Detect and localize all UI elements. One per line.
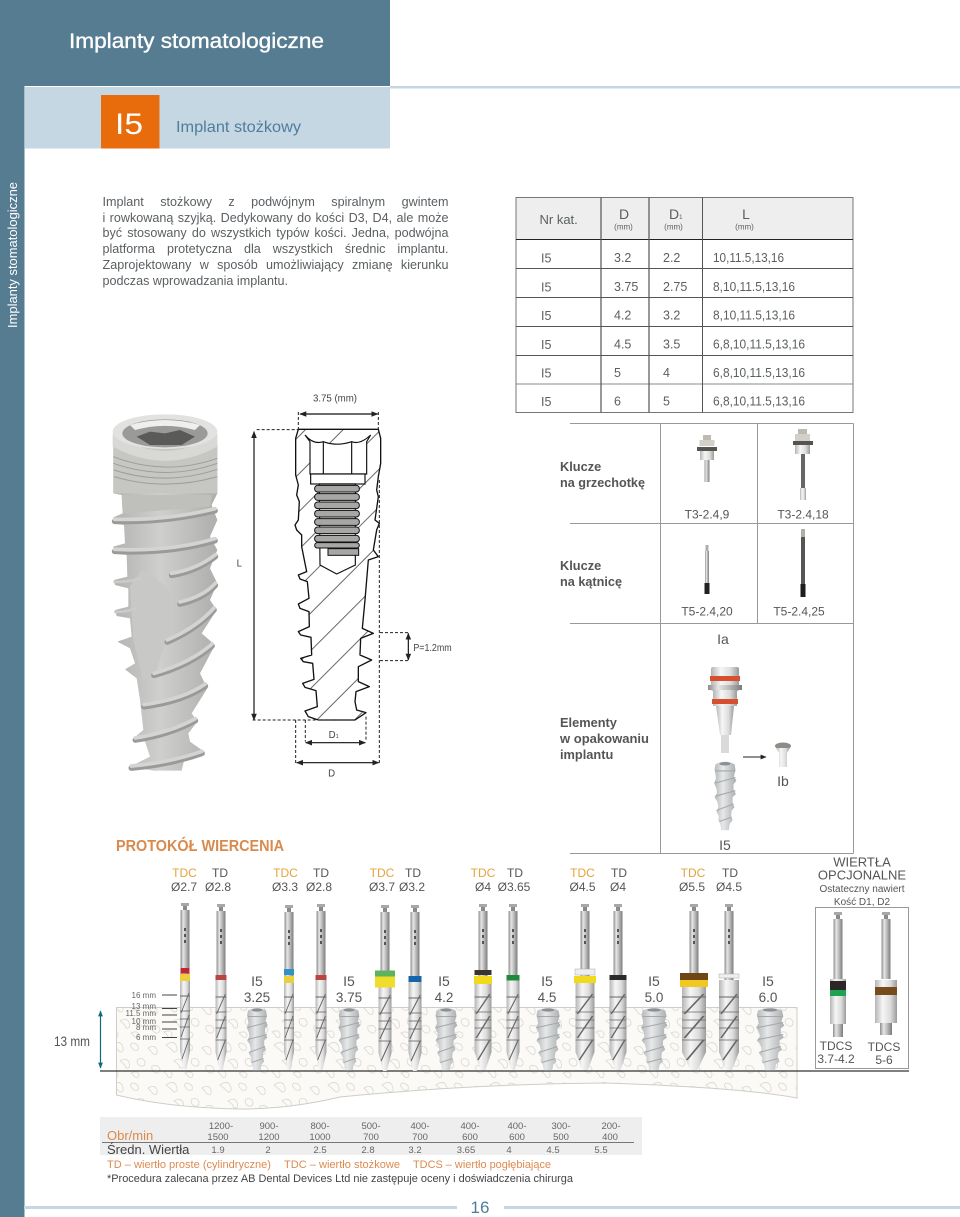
drill type labels: Ø4 <box>475 880 491 894</box>
implant 3.25: I5 <box>251 973 263 989</box>
product name: Implant stożkowy <box>176 119 301 136</box>
optional drills heading: Kość D1, D2 <box>834 897 891 908</box>
table rows <box>541 251 805 409</box>
section outline <box>295 429 381 720</box>
left sidebar band <box>0 0 24 1217</box>
drill TD 2.8 second <box>316 904 326 1070</box>
table rows: 10,11.5,13,16 <box>713 251 784 265</box>
diameter values: 4 <box>506 1145 512 1156</box>
product description <box>102 195 448 288</box>
category labels: implantu <box>560 747 613 762</box>
drill TD 2.8 <box>216 904 226 1070</box>
dimension lines <box>253 412 408 763</box>
implant 3.75: 3.75 <box>336 990 362 1005</box>
internal hex socket <box>305 435 371 574</box>
table rows: 3.2 <box>663 308 680 322</box>
optional drills heading: Ostateczny nawiert <box>819 884 905 895</box>
optional drill labels <box>817 1039 900 1067</box>
optional drill labels: TDCS <box>868 1040 900 1054</box>
category labels: Klucze <box>560 558 601 573</box>
product description: platforma protetyczna dla wszystkich średnic implantu. <box>102 242 448 256</box>
depth scale labels: 13 mm <box>132 1002 156 1011</box>
drill TDC 4 <box>474 904 492 1070</box>
depth scale labels: 8 mm <box>136 1023 156 1032</box>
diameter values: 2.8 <box>361 1145 375 1156</box>
13 mm depth marker <box>54 1011 100 1068</box>
table header: (mm) <box>614 222 633 232</box>
table rows: 6 <box>614 394 621 408</box>
implant 4.2: 4.2 <box>435 990 453 1005</box>
implant 3.75: I5 <box>343 973 355 989</box>
drill type labels: Ø3.2 <box>399 880 425 894</box>
speed values: 800- <box>310 1121 330 1132</box>
depth scale labels: 16 mm <box>132 991 156 1000</box>
bone cross-section <box>116 1008 797 1109</box>
implant 6.0: I5 <box>762 973 774 989</box>
product description: Zaprojektowany w sposób umożliwiający zmianę kierunku <box>102 258 448 272</box>
speed values: 900- <box>259 1121 279 1132</box>
optional drills heading <box>818 854 906 908</box>
table rows: 2.75 <box>663 280 687 294</box>
drill TDC 3.3 <box>284 905 294 1070</box>
table rows: I5 <box>541 395 551 409</box>
bone reference line <box>100 1070 909 1072</box>
specification table <box>516 198 853 412</box>
table rows: 6,8,10,11.5,13,16 <box>713 338 805 352</box>
table header: Nr kat. <box>540 212 578 227</box>
dimension labels: D <box>328 769 335 780</box>
icon: ratchet key long <box>793 429 813 500</box>
speed table <box>100 1117 642 1157</box>
table rows: 8,10,11.5,13,16 <box>713 308 795 322</box>
implant 4.5: 4.5 <box>538 990 556 1005</box>
implant 5.0 <box>641 973 668 1070</box>
drill type labels: Ø3.3 <box>272 880 298 894</box>
product code badge <box>101 95 160 148</box>
dimension arrows <box>254 414 408 763</box>
optional drill labels: 3.7-4.2 <box>817 1052 855 1066</box>
depth scale labels: 11.5 mm <box>125 1009 156 1018</box>
table rows: 3.2 <box>614 251 631 265</box>
drill type labels: TDC <box>273 866 298 880</box>
tool codes: I5 <box>719 837 731 853</box>
icon: I5 implant in package <box>714 762 736 830</box>
drill type labels: Ø4.5 <box>716 880 742 894</box>
implant 4.5 <box>536 973 561 1070</box>
optional drill labels: 5-6 <box>875 1053 893 1067</box>
category labels: Elementy <box>560 715 618 730</box>
table header: (mm) <box>735 222 754 232</box>
icon: Ib screw <box>775 742 791 767</box>
diameter values: 4.5 <box>546 1145 560 1156</box>
speed values: 400- <box>507 1121 527 1132</box>
dimension labels: P=1.2mm <box>413 643 452 654</box>
page number: 16 <box>471 1198 489 1217</box>
implant photo <box>113 414 217 771</box>
drill type labels: Ø2.8 <box>205 880 231 894</box>
speed values: 600 <box>462 1132 478 1143</box>
dimension labels <box>237 394 452 780</box>
depth scale labels: 10 mm <box>132 1017 156 1026</box>
table rows: 5 <box>663 394 670 408</box>
implant 4.5: I5 <box>541 973 553 989</box>
tool codes: T5-2.4,25 <box>773 604 825 618</box>
table rows: 4.2 <box>614 308 631 322</box>
speed values: 500- <box>361 1121 381 1132</box>
legend: TDC – wiertło stożkowe <box>284 1159 400 1171</box>
implant 4.2: I5 <box>438 973 450 989</box>
category labels <box>559 459 649 762</box>
product description: Implant stożkowy z podwójnym spiralnym gwintem <box>102 195 448 209</box>
footnote: *Procedura zalecana przez AB Dental Devices Ltd nie zastępuje oceny i doświadczenia chirurga <box>107 1173 574 1185</box>
drill TDCS 5-6 <box>875 912 897 1035</box>
drill TD 3.2 <box>408 905 422 1071</box>
drill type labels: TDC <box>172 866 197 880</box>
table rows: 6,8,10,11.5,13,16 <box>713 366 805 380</box>
depth scale labels: 6 mm <box>136 1033 156 1042</box>
header title: Implanty stomatologiczne <box>69 30 324 53</box>
drill TDC 2.7 <box>180 903 190 1069</box>
table rows: 6,8,10,11.5,13,16 <box>713 394 805 408</box>
optional drills heading: WIERTŁA <box>833 854 891 870</box>
row label: Średn. Wiertła <box>107 1142 190 1157</box>
icon: handpiece key long <box>800 529 806 597</box>
drill TDC 4.5 <box>574 904 596 1070</box>
speed values: 300- <box>551 1121 571 1132</box>
speed values: 200- <box>601 1121 621 1132</box>
drill TD 3.65 <box>506 904 520 1070</box>
speed values: 400- <box>410 1121 430 1132</box>
drill type labels: TD <box>405 866 421 880</box>
drill type labels: TD <box>611 866 627 880</box>
speed values: 1000 <box>309 1132 331 1143</box>
internal thread <box>315 485 359 555</box>
drill type labels: Ø2.8 <box>306 880 332 894</box>
speed values: 500 <box>553 1132 569 1143</box>
tool codes: T3-2.4,9 <box>685 508 730 522</box>
drill type labels <box>171 866 742 894</box>
table rows: I5 <box>541 338 551 352</box>
diameter values: 2 <box>265 1145 271 1156</box>
13 mm depth marker: 13 mm <box>54 1034 90 1049</box>
drill type labels: TDC <box>570 866 595 880</box>
legend: TDCS – wiertło pogłębiające <box>413 1159 551 1171</box>
drill TD 4.5 <box>719 904 739 1070</box>
row label: Obr/min <box>107 1128 153 1143</box>
speed values <box>207 1121 621 1143</box>
arrow to Ib <box>743 756 766 758</box>
table header: D <box>619 206 629 222</box>
drill type labels: Ø3.7 <box>369 880 395 894</box>
implant cross-section drawing <box>237 394 452 780</box>
table rows: I5 <box>541 309 551 323</box>
top header band <box>0 0 390 86</box>
footer rules <box>24 1206 960 1209</box>
dimension labels: 3.75 (mm) <box>313 394 357 405</box>
drill type labels: TD <box>313 866 329 880</box>
drill type labels: TD <box>212 866 228 880</box>
table rows: 8,10,11.5,13,16 <box>713 280 795 294</box>
optional drills heading: OPCJONALNE <box>818 868 906 882</box>
drill type labels: TD <box>722 866 738 880</box>
legend: TD – wiertło proste (cylindryczne) <box>107 1159 271 1171</box>
table rows: 5 <box>614 366 621 380</box>
drilling protocol heading: PROTOKÓŁ WIERCENIA <box>116 837 284 855</box>
sidebar label: Implanty stomatologiczne <box>5 182 20 328</box>
drill type labels: Ø3.65 <box>498 880 531 894</box>
drill type labels: TDC <box>370 866 395 880</box>
speed values: 1500 <box>207 1132 229 1143</box>
drill TD 4 <box>610 904 626 1070</box>
table header: (mm) <box>664 222 683 232</box>
tool codes: T5-2.4,20 <box>681 604 733 618</box>
drill TDCS 3.7-4.2 <box>830 912 846 1037</box>
tool codes <box>681 508 829 853</box>
table rows: I5 <box>541 252 551 266</box>
diameter values <box>211 1145 608 1156</box>
category labels: na kątnicę <box>560 574 622 589</box>
drill TDC 5.5 <box>680 904 708 1070</box>
speed values: 700 <box>363 1132 379 1143</box>
category labels: Klucze <box>560 459 601 474</box>
table rows: I5 <box>541 280 551 294</box>
table header: D1 <box>669 206 683 222</box>
table rows: 4.5 <box>614 338 631 352</box>
table rows: 4 <box>663 366 670 380</box>
speed values: 600 <box>509 1132 525 1143</box>
table rows: 3.5 <box>663 338 680 352</box>
implant 6.0: 6.0 <box>759 990 777 1005</box>
icon: handpiece key short <box>704 545 710 594</box>
product title panel <box>25 87 390 148</box>
dimension labels: L <box>237 559 243 570</box>
drill type labels: Ø5.5 <box>679 880 705 894</box>
diameter values: 3.65 <box>457 1145 475 1156</box>
implant 4.2 <box>435 973 457 1070</box>
diameter values: 5.5 <box>594 1145 608 1156</box>
drill type labels: Ø4.5 <box>569 880 596 894</box>
table header: L <box>742 206 750 222</box>
table rows: I5 <box>541 366 551 380</box>
product description: być stosowany do wszystkich typów kości. Jedna, podwójna <box>102 226 448 240</box>
drill type labels: Ø2.7 <box>171 880 197 894</box>
implant 6.0 <box>756 973 784 1070</box>
icon: ratchet key short <box>697 435 717 482</box>
optional drills box <box>816 908 908 1068</box>
product description: i rowkowaną szyjką. Dedykowany do kości D3, D4, ale może <box>102 211 448 225</box>
tool codes: Ia <box>717 631 729 647</box>
speed values: 1200 <box>258 1132 280 1143</box>
speed values: 1200- <box>209 1121 233 1132</box>
implant 3.75 <box>336 973 362 1070</box>
tool codes: Ib <box>777 773 789 789</box>
drill type labels: TDC <box>681 866 706 880</box>
optional drill labels: TDCS <box>820 1039 852 1053</box>
depth scale labels <box>125 991 177 1042</box>
product description: podczas wprowadzania implantu. <box>102 274 288 288</box>
category labels: na grzechotkę <box>560 475 645 490</box>
implant 3.25 <box>244 973 270 1070</box>
drill type labels: Ø4 <box>610 880 626 894</box>
product code badge: I5 <box>115 108 143 141</box>
top rule <box>390 86 960 88</box>
dimension labels: D1 <box>329 730 339 741</box>
diameter values: 3.2 <box>408 1145 422 1156</box>
drill type labels: TDC <box>471 866 496 880</box>
implant 3.25: 3.25 <box>244 990 270 1005</box>
accessories table <box>559 424 854 854</box>
drill TDC 3.7 <box>375 905 395 1071</box>
icon: Ia transfer <box>708 667 742 753</box>
table header <box>540 206 754 232</box>
implant 5.0: I5 <box>648 973 660 989</box>
speed values: 400- <box>460 1121 480 1132</box>
tool codes: T3-2.4,18 <box>777 508 829 522</box>
diameter values: 1.9 <box>211 1145 225 1156</box>
drill type labels: TD <box>507 866 523 880</box>
diameter values: 2.5 <box>313 1145 327 1156</box>
legend <box>107 1159 551 1171</box>
speed values: 400 <box>602 1132 618 1143</box>
speed values: 700 <box>412 1132 428 1143</box>
category labels: w opakowaniu <box>559 731 649 746</box>
table rows: 3.75 <box>614 280 638 294</box>
table rows: 2.2 <box>663 251 680 265</box>
implant 5.0: 5.0 <box>645 990 663 1005</box>
